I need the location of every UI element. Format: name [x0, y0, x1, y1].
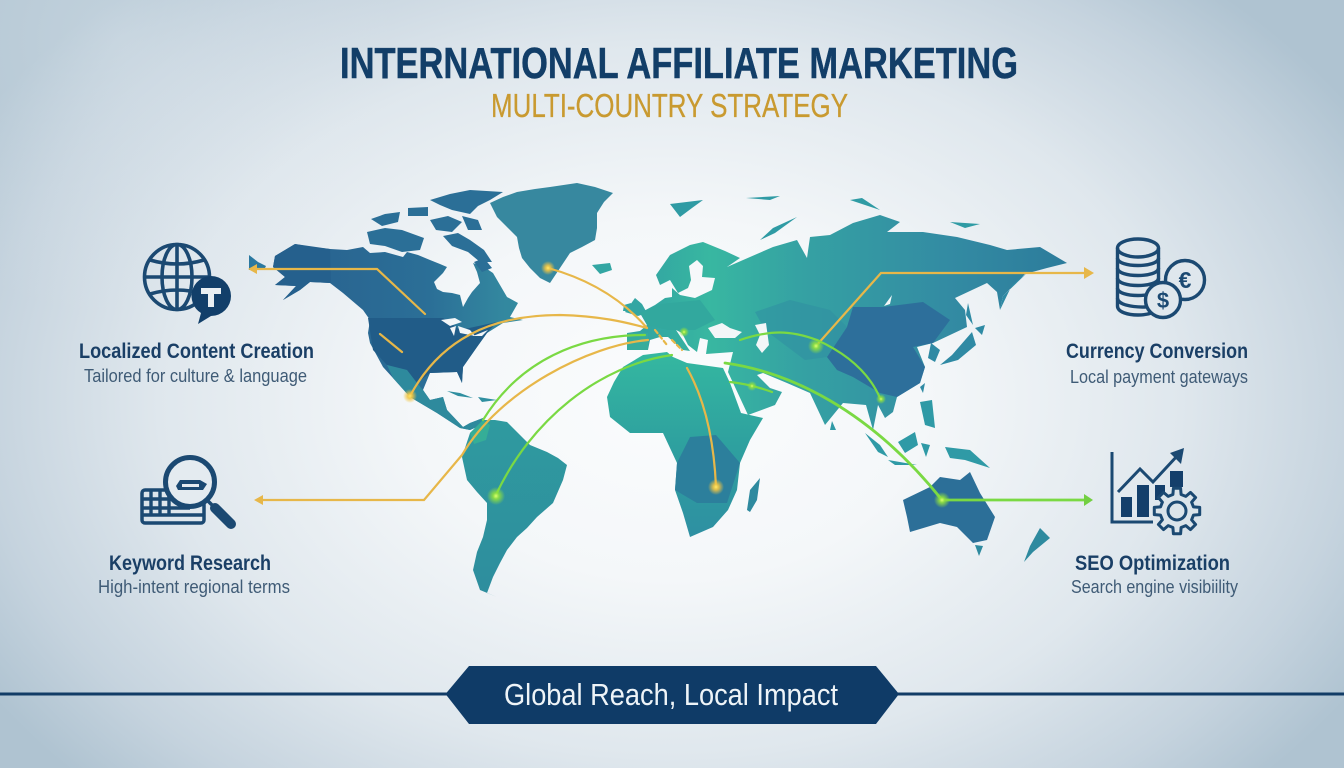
- arrowheads: [248, 264, 1094, 506]
- panel: seo optimization: [1071, 448, 1238, 597]
- banner: global reach, local impact: Global Reach, Local Impact: [504, 677, 838, 712]
- arrow-tip island: [249, 255, 266, 270]
- description: Tailored for culture & language: [84, 366, 307, 386]
- banner: global reach, local impact: [446, 666, 899, 724]
- iceland and uk: [592, 263, 647, 316]
- north america: [249, 190, 523, 430]
- heading: Keyword Research: [109, 552, 271, 575]
- central africa dark region: [675, 435, 740, 503]
- eurasia: [627, 215, 1067, 430]
- description: High-intent regional terms: [98, 577, 290, 597]
- black sea, caspian, lake baikal: [708, 295, 892, 353]
- panel: keyword research: [98, 458, 290, 597]
- europe shade: [640, 300, 715, 330]
- africa: [607, 352, 763, 537]
- footer rule: [0, 692, 1344, 696]
- icon: keyboard and magnifier: [142, 458, 231, 524]
- description: Search engine visibiility: [1071, 577, 1238, 597]
- australia: [903, 472, 995, 543]
- icon: coin stack with dollar and euro: [1118, 239, 1204, 318]
- subtitle: MULTI-COUNTRY STRATEGY: [491, 87, 848, 124]
- title: INTERNATIONAL AFFILIATE MARKETING: [340, 39, 1018, 88]
- contiguous united states: [368, 318, 497, 383]
- iberia: [627, 333, 648, 350]
- yellow routes: [253, 268, 1090, 500]
- alaska: [273, 244, 331, 300]
- heading: SEO Optimization: [1075, 552, 1230, 575]
- great lakes: [441, 318, 488, 336]
- icon: growth chart with gear: [1112, 448, 1200, 534]
- caribbean islands: [447, 391, 497, 402]
- colombia highlight: [470, 420, 490, 444]
- world map: [249, 183, 1067, 597]
- southeast asia islands: [830, 400, 990, 468]
- icon: coin stack with dollar and euro: $: [1157, 288, 1169, 313]
- icon: coin stack with dollar and euro: €: [1179, 267, 1192, 293]
- south america: [462, 420, 567, 597]
- central asia shade: [755, 300, 847, 360]
- glowing location dots: [403, 261, 950, 508]
- connection routes: [253, 268, 1090, 500]
- green routes: [483, 332, 1088, 500]
- canadian arctic islands: [367, 190, 503, 272]
- china dark region: [827, 302, 950, 397]
- description: Local payment gateways: [1070, 367, 1248, 387]
- arctic and pacific islands: [670, 196, 980, 240]
- greenland: [490, 183, 613, 283]
- icon: globe with text bubble: [144, 244, 231, 324]
- panel: localized content creation: [79, 244, 314, 386]
- japan, sakhalin, korea: [920, 273, 1027, 393]
- tasmania, new zealand, madagascar: [747, 478, 1050, 562]
- heading: Localized Content Creation: [79, 340, 314, 363]
- heading: Currency Conversion: [1066, 340, 1248, 363]
- panel: currency conversion: [1066, 239, 1248, 387]
- mexico and central america: [387, 365, 486, 430]
